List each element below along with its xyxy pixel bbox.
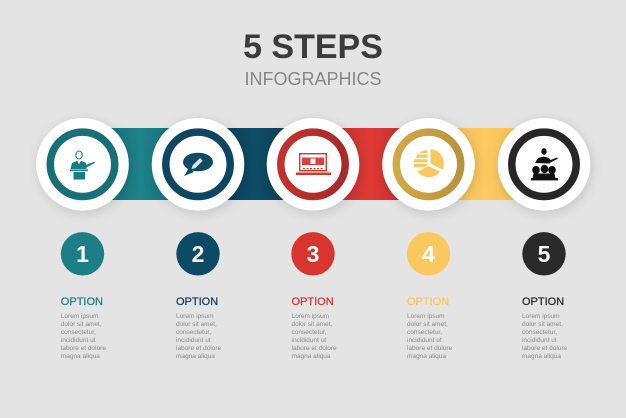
icon: speech bubble with pencil xyxy=(183,153,213,176)
step 2 medallion xyxy=(152,118,246,213)
connecting band: navy xyxy=(215,128,295,200)
number badge 5: 5 xyxy=(538,241,551,267)
text block 2: labore et dolore xyxy=(176,345,222,352)
number badge 2 xyxy=(176,232,220,276)
text block 4: consectetur, xyxy=(407,329,442,336)
connecting band: teal xyxy=(100,128,180,200)
text block 2: Lorem ipsum xyxy=(176,313,214,320)
text block 5: labore et dolore xyxy=(522,345,568,352)
text block 4: magna aliqua xyxy=(407,353,446,360)
text block 5: Lorem ipsum xyxy=(522,313,560,320)
text block 4: OPTION xyxy=(407,296,449,308)
text block 4: Lorem ipsum xyxy=(407,313,445,320)
text block 4: dolor sit amet, xyxy=(407,321,448,328)
text block 5: OPTION xyxy=(522,296,564,308)
text block 2 xyxy=(176,296,222,360)
text block 1: magna aliqua xyxy=(61,353,100,360)
text block 3: magna aliqua xyxy=(292,353,331,360)
text block 3: OPTION xyxy=(292,296,334,308)
text block 1: OPTION xyxy=(61,296,103,308)
text block 3 xyxy=(292,296,337,360)
text block 3: consectetur, xyxy=(292,329,327,336)
text block 5: magna aliqua xyxy=(522,353,561,360)
text block 1: incididunt ut xyxy=(61,337,96,344)
text block 5: consectetur, xyxy=(522,329,557,336)
text block 3: incididunt ut xyxy=(292,337,326,344)
title: 5 STEPS xyxy=(243,28,383,66)
text block 1: Lorem ipsum xyxy=(61,313,98,320)
step 3 medallion xyxy=(267,118,360,213)
text block 4: incididunt ut xyxy=(407,337,442,344)
icon: speaker at podium xyxy=(70,151,95,180)
step 1 medallion xyxy=(36,118,130,213)
text block 2: incididunt ut xyxy=(176,337,211,344)
text block 1: labore et dolore xyxy=(61,345,106,352)
number badge 5 xyxy=(522,232,566,276)
text block 5: dolor sit amet, xyxy=(522,321,563,328)
text block 3: dolor sit amet, xyxy=(292,321,333,328)
text block 2: dolor sit amet, xyxy=(176,321,217,328)
text block 2: magna aliqua xyxy=(176,353,215,360)
number badge 3 xyxy=(291,232,335,276)
connecting band: red xyxy=(330,128,410,200)
text block 3: labore et dolore xyxy=(292,345,337,352)
icon: speaker with audience xyxy=(531,148,558,180)
text block 5 xyxy=(522,296,568,360)
number badge 4 xyxy=(407,232,450,276)
text block 3: Lorem ipsum xyxy=(292,313,329,320)
step 5 medallion xyxy=(498,118,592,213)
connecting band: yellow xyxy=(445,128,525,200)
icon: pie chart xyxy=(414,149,444,177)
text block 1 xyxy=(61,296,106,360)
text block 2: OPTION xyxy=(176,296,218,308)
text block 4 xyxy=(407,296,453,360)
number badge 3: 3 xyxy=(307,241,319,267)
text block 4: labore et dolore xyxy=(407,345,453,352)
text block 2: consectetur, xyxy=(176,329,211,336)
icon: laptop xyxy=(296,154,331,175)
number badge 1 xyxy=(61,232,104,276)
text block 1: dolor sit amet, xyxy=(61,321,102,328)
text block 1: consectetur, xyxy=(61,329,96,336)
number badge 2: 2 xyxy=(192,241,204,267)
subtitle: INFOGRAPHICS xyxy=(244,69,382,89)
number badge 4: 4 xyxy=(422,241,435,267)
number badge 1: 1 xyxy=(76,241,89,267)
text block 5: incididunt ut xyxy=(522,337,557,344)
step 4 medallion xyxy=(382,118,476,213)
